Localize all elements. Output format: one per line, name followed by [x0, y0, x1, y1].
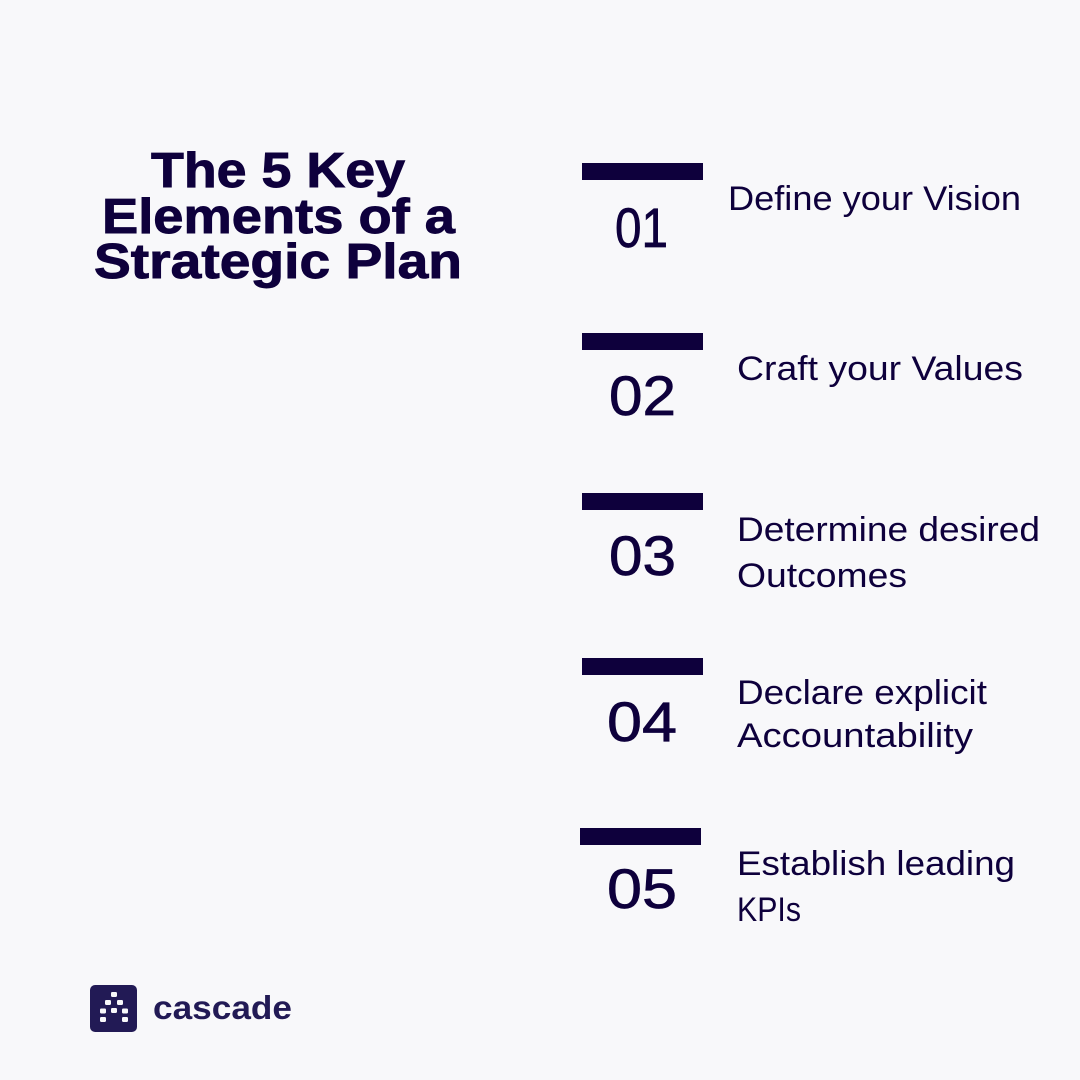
item 01: define vision [582, 163, 1021, 259]
item 04: declare accountability: Accountability [737, 717, 973, 755]
title: Strategic Plan [94, 235, 462, 289]
item 02: craft values [582, 333, 1023, 427]
item 02: craft values: 02 [609, 364, 676, 427]
item 05: establish KPIs: 05 [607, 857, 677, 920]
item 04: declare accountability: 04 [607, 690, 677, 753]
item 05: establish KPIs: KPIs [737, 891, 801, 929]
logo: cascade: cascade [153, 989, 292, 1026]
item 03: determine outcomes: Outcomes [737, 557, 907, 595]
item 05: establish KPIs [580, 828, 1015, 929]
title [94, 144, 462, 289]
item 04: declare accountability: Declare explicit [737, 674, 988, 712]
item 03: determine outcomes [582, 493, 1040, 595]
item 03: determine outcomes: Determine desired [737, 511, 1040, 549]
title: Elements of a [102, 190, 456, 244]
item 01: define vision: Define your Vision [728, 180, 1021, 218]
title: The 5 Key [151, 144, 405, 198]
logo: cascade [90, 985, 292, 1032]
item 02: craft values: Craft your Values [737, 350, 1023, 388]
item 05: establish KPIs: Establish leading [737, 845, 1015, 883]
item 03: determine outcomes: 03 [609, 524, 676, 587]
item 04: declare accountability [582, 658, 988, 755]
item 01: define vision: 01 [615, 196, 668, 259]
